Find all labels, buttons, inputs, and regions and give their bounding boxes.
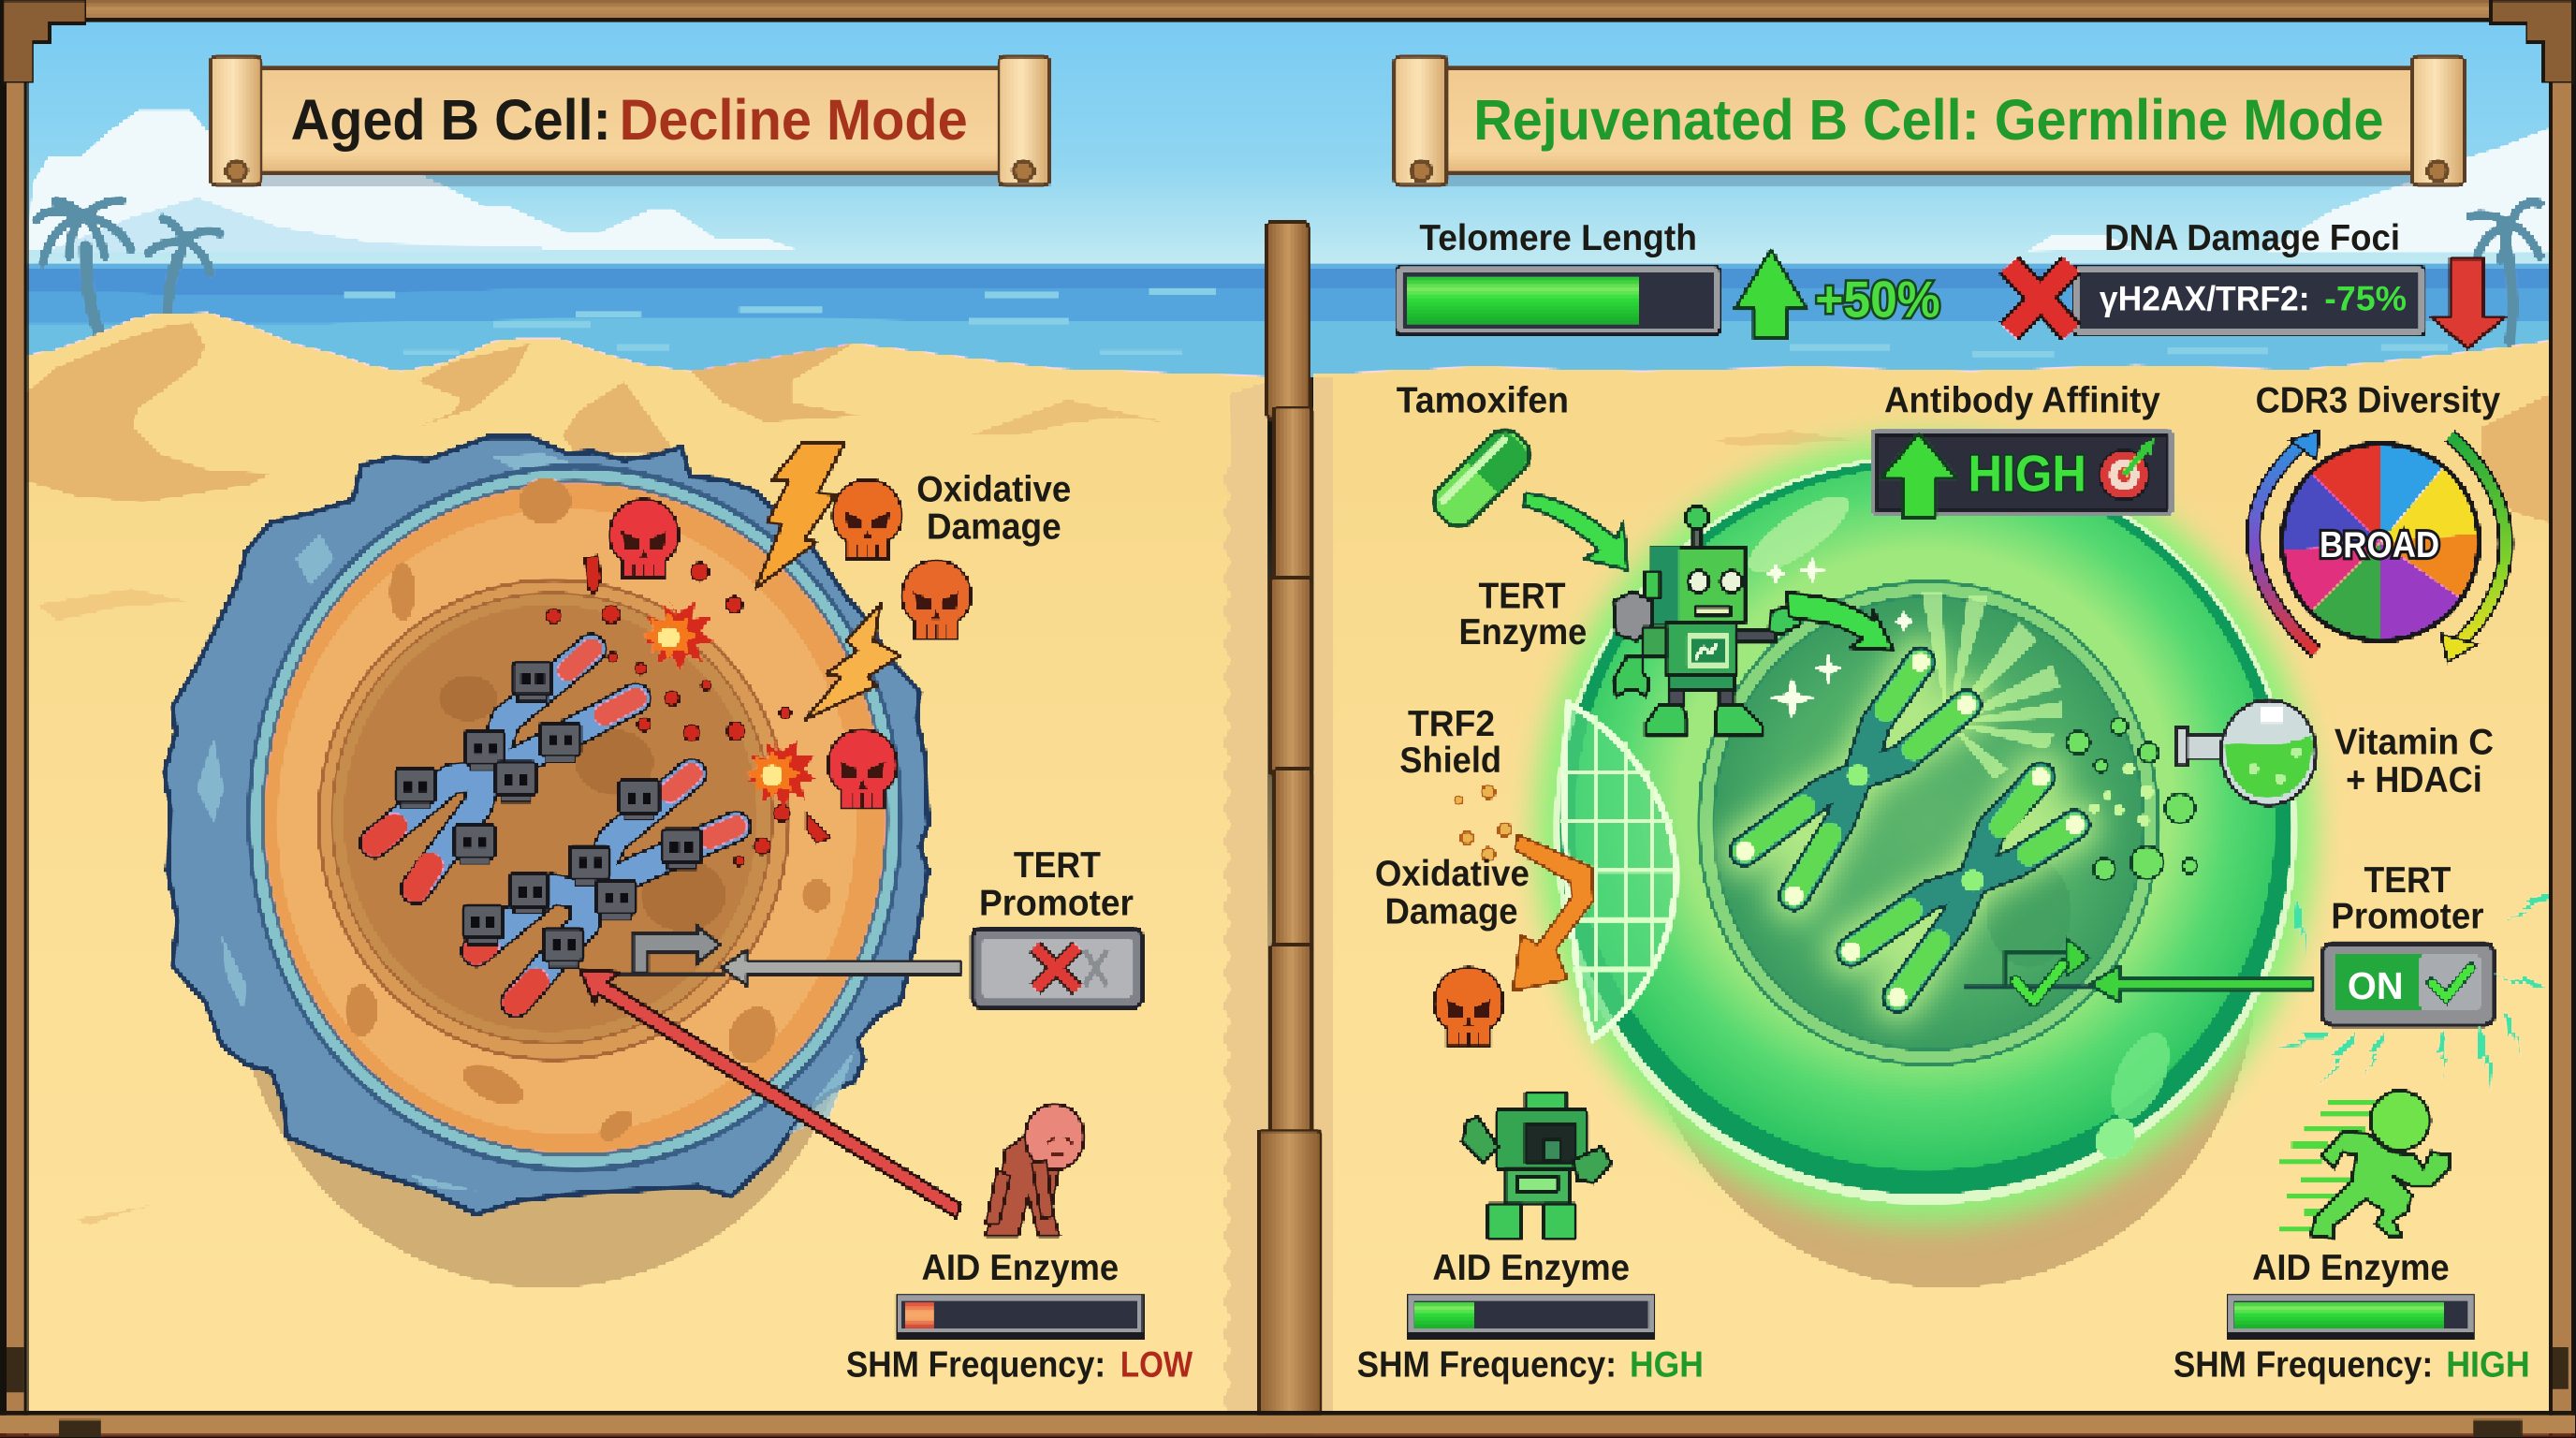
heading: rejuvenated: Rejuvenated B Cell: Germline Mode [1473, 88, 2384, 153]
telomere label: Telomere Length [1419, 218, 1697, 258]
DNA damage label: DNA Damage Foci [2104, 218, 2400, 258]
explosion 2 [746, 738, 817, 810]
promoter check symbol [1963, 938, 2095, 1001]
TERT promoter label (aged): Promoter [979, 884, 1134, 924]
chromosome 2 [476, 774, 736, 1003]
telomere bar [1397, 266, 1720, 335]
light ring [246, 463, 903, 1173]
cyan sparks [2272, 875, 2554, 1094]
icon: vitamin flask [2176, 700, 2317, 805]
label: TERT enzyme: TERT [1478, 576, 1566, 616]
label: TRF2 shield: Shield [1399, 741, 1501, 781]
damage value: γH2AX/TRF2: [2100, 280, 2310, 318]
label: tamoxifen: Tamoxifen [1397, 381, 1569, 421]
plus 50 percent: +50% [1815, 271, 1940, 329]
SHM frequency right: SHM Frequency: [2174, 1345, 2433, 1386]
aged SHM frequency: SHM Frequency: [846, 1345, 1105, 1386]
green curved arrow from pill [1523, 492, 1628, 570]
nucleus [318, 580, 788, 1060]
background: sea [0, 263, 2576, 378]
SHM frequency mid: SHM Frequency: [1357, 1345, 1617, 1386]
sand edge strips [1222, 378, 1334, 1416]
label: vitamin C + HDACi: + HDACi [2346, 760, 2482, 800]
background: sky [0, 0, 2576, 271]
cell body [1554, 455, 2296, 1204]
oxidative damage label: Oxidative [916, 469, 1071, 509]
text layer [291, 88, 2530, 1386]
label: TERT enzyme [1458, 576, 1587, 653]
label: TRF2 shield: TRF2 [1408, 704, 1495, 744]
light rays [1922, 594, 2062, 779]
heading: aged: Decline Mode [620, 88, 968, 153]
aged SHM frequency: LOW [1120, 1345, 1193, 1386]
AID bar mid [1406, 1293, 1656, 1339]
label: TERT promoter (rejuvenated): TERT [2364, 860, 2452, 901]
diversity arc left [2253, 431, 2320, 653]
shadow: right cell [1636, 651, 2257, 1288]
up arrow telomere [1734, 250, 1807, 339]
orange skull 2 [901, 560, 971, 639]
TERT promoter label (aged): TERT [1014, 845, 1101, 886]
nucleus [1699, 581, 2159, 1064]
icon: tamoxifen pill [1426, 422, 1538, 534]
red skull 2 [828, 729, 897, 808]
red skull 1 [609, 500, 679, 579]
clouds [28, 110, 2550, 252]
scroll banner right [1395, 56, 2464, 187]
scroll banner left [211, 56, 1051, 187]
label: CDR3 diversity: CDR3 Diversity [2256, 381, 2501, 421]
antibody affinity box [1873, 431, 2172, 518]
label: TERT promoter (rejuvenated) [2331, 860, 2484, 937]
ON text: ON [2348, 964, 2404, 1007]
label: vitamin C + HDACi: Vitamin C [2334, 723, 2494, 763]
TRF2 shield [1560, 703, 1676, 1038]
debris [547, 555, 831, 866]
SHM frequency mid: HGH [1630, 1345, 1704, 1386]
TERT promoter label (aged) [979, 845, 1134, 924]
red X [2009, 265, 2071, 332]
promoter bent arrow [616, 925, 724, 975]
icon: diversity wheel [2282, 444, 2479, 640]
label: oxidative damage (rejuvenated): Damage [1384, 891, 1518, 932]
green arrow to promoter [2089, 966, 2313, 1003]
cytoplasm [263, 481, 887, 1155]
label: vitamin C + HDACi [2334, 723, 2494, 800]
chromosome 1 glowing [1745, 662, 1967, 895]
cell highlights [2088, 1110, 2144, 1167]
AID label right: AID Enzyme [2252, 1248, 2450, 1288]
panel: aged B cell [165, 437, 971, 1217]
AID bar right [2226, 1293, 2476, 1339]
label: oxidative damage (rejuvenated): Oxidative [1375, 854, 1530, 894]
cell glow [1534, 435, 2317, 1224]
label: oxidative damage (rejuvenated) [1375, 854, 1530, 932]
HIGH text: HIGH [1968, 446, 2086, 503]
label: TERT enzyme: Enzyme [1458, 612, 1587, 653]
chromosome 1 [374, 649, 636, 888]
chromosome glow [1745, 662, 2075, 997]
cell membrane [165, 437, 929, 1214]
label: antibody affinity: Antibody Affinity [1884, 381, 2160, 421]
green arrow from robot [1787, 594, 1895, 651]
red down arrow [2431, 258, 2505, 348]
aged AID label: AID Enzyme [922, 1248, 1119, 1288]
explosion 1 [642, 600, 714, 671]
SHM frequency right: HIGH [2446, 1345, 2530, 1386]
label: TRF2 shield [1399, 704, 1501, 781]
oxidative damage label: Damage [927, 507, 1061, 548]
sand base [0, 312, 1265, 1438]
diversity arc right [2441, 435, 2506, 662]
TERT promoter off switch [973, 929, 1142, 1007]
AID label mid: AID Enzyme [1432, 1248, 1630, 1288]
BROAD text: BROAD [2320, 525, 2439, 565]
deflected orange skull [1434, 968, 1503, 1047]
chromosome 2 glowing [1852, 777, 2075, 997]
TERT promoter on switch [2323, 943, 2494, 1025]
orange deflected arrow [1513, 835, 1593, 990]
sparkles [1766, 557, 1914, 720]
sand dunes [26, 322, 2548, 1225]
oxidative damage label [916, 469, 1071, 548]
damage bar [2073, 266, 2424, 335]
label: TERT promoter (rejuvenated): Promoter [2331, 897, 2484, 937]
heading: aged: Aged B Cell: [291, 88, 611, 153]
aged AID enzyme figure [986, 1104, 1084, 1236]
red arrow [580, 969, 961, 1217]
heading: aged [291, 88, 968, 153]
panel: rejuvenated B cell [1534, 435, 2317, 1224]
lightning 1 [755, 444, 844, 588]
frame corners [4, 0, 85, 82]
icon: TERT robot [1613, 506, 1800, 736]
icon: green AID robot [1462, 1093, 1612, 1239]
aged AID bar [895, 1293, 1145, 1339]
lower sand tone [0, 492, 2576, 1438]
green bubbles [2067, 718, 2197, 880]
damage value: -75% [2324, 280, 2407, 318]
orange particles [1455, 785, 1512, 861]
lightning 2 [805, 605, 900, 720]
icon: running AID figure [2280, 1091, 2450, 1239]
shadow: left cell [237, 651, 857, 1288]
divider post [1258, 222, 1321, 1418]
grey arrow [721, 949, 961, 986]
orange skull 1 [833, 479, 901, 559]
palm trees [37, 200, 2539, 342]
